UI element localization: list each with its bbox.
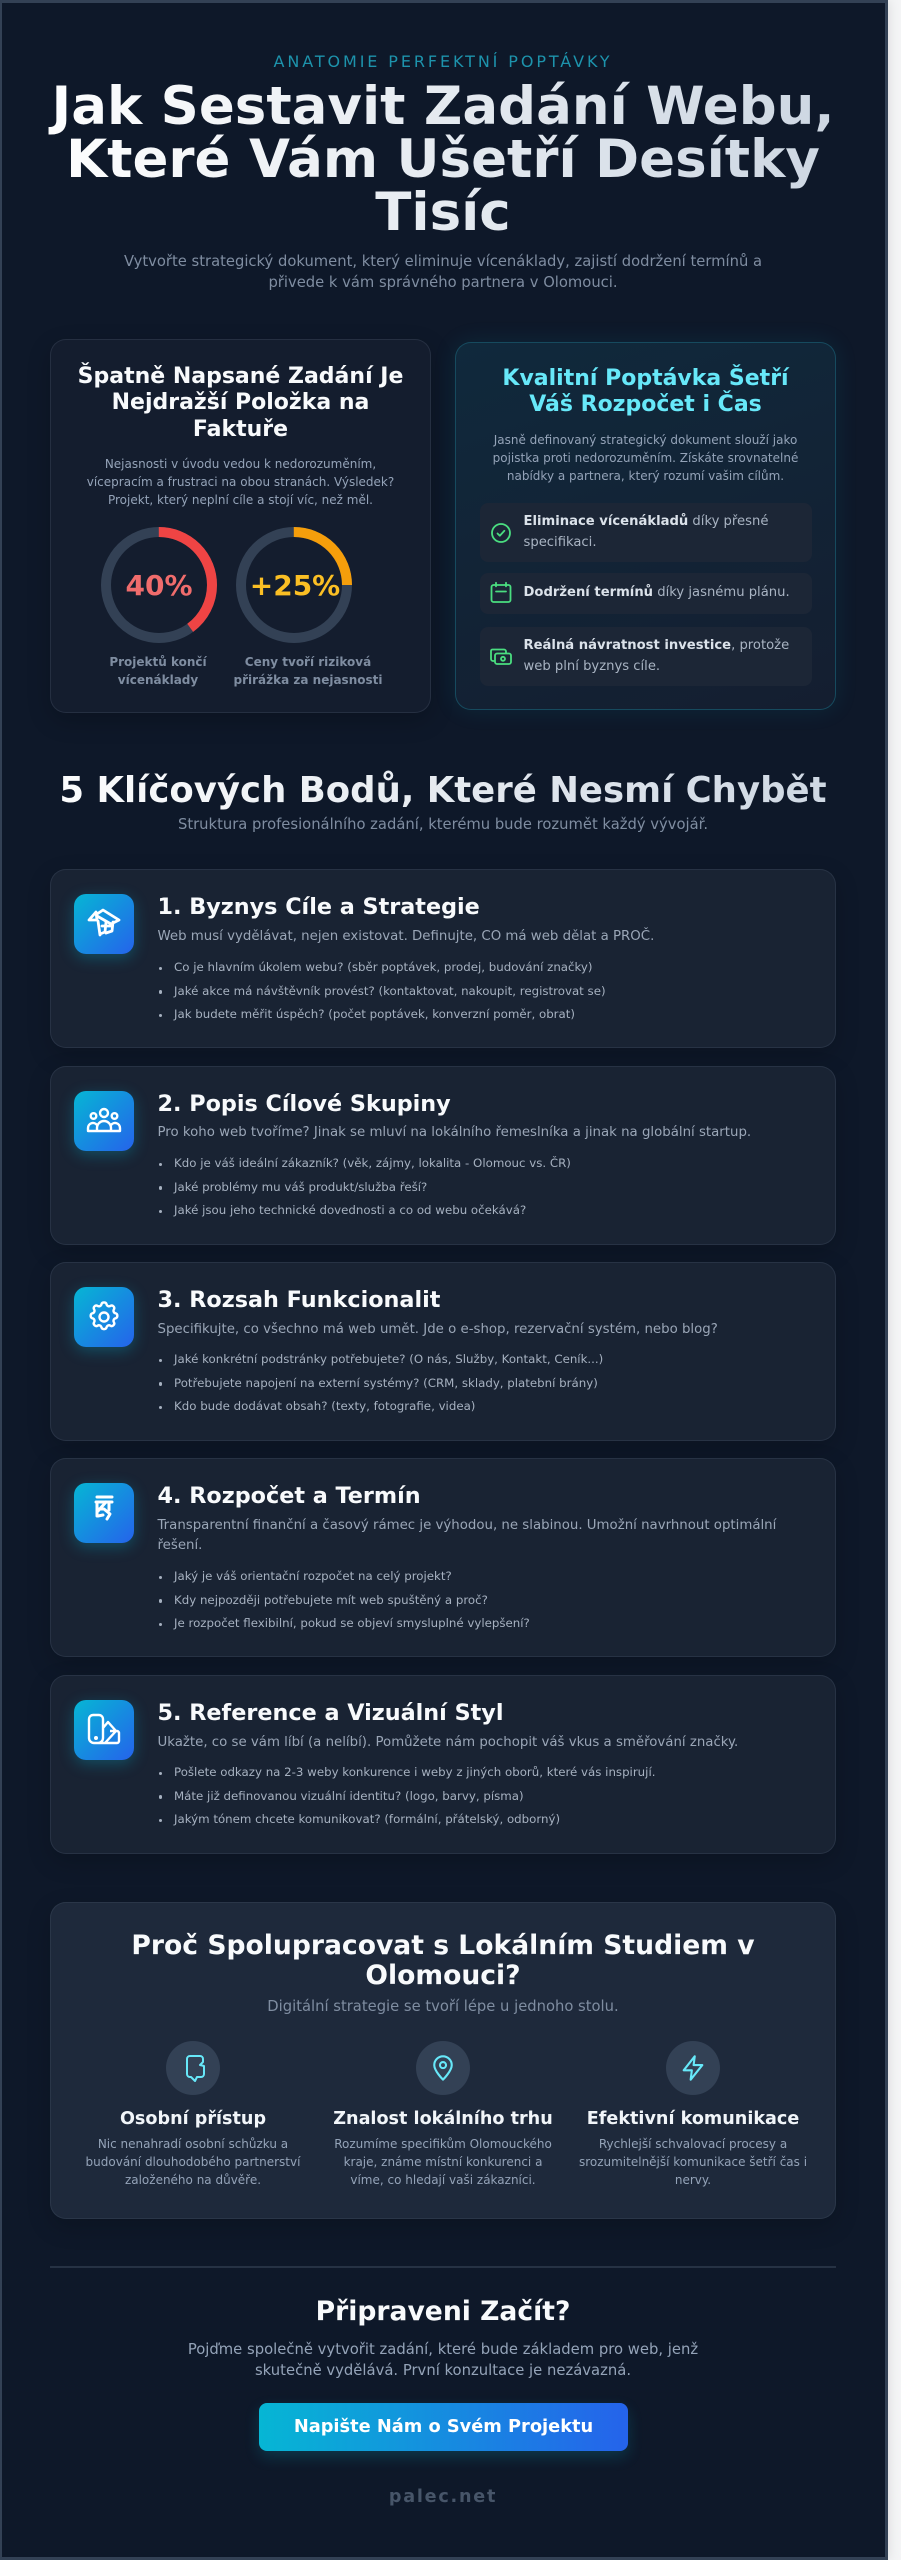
step description: Specifikujte, co všechno má web umět. Jde o e-shop, rezervační systém, nebo blog?	[158, 1322, 718, 1337]
why heading: Olomouci?	[365, 1960, 521, 1991]
icon: swatches	[74, 1700, 134, 1760]
column: personal	[86, 2041, 301, 2187]
checklist: Potřebujete napojení na externí systémy? (CRM, sklady, platební brány)	[174, 1376, 598, 1390]
checklist: Jaký je váš orientační rozpočet na celý projekt?	[174, 1569, 452, 1583]
step heading: 3. Rozsah Funkcionalit	[158, 1287, 440, 1313]
subtitle: Vytvořte strategický dokument, který eliminuje vícenáklady, zajistí dodržení termínů a	[124, 253, 762, 270]
section subtitle: Struktura profesionálního zadání, kterému bude rozumět každý vývojář.	[178, 816, 708, 833]
why heading: Proč Spolupracovat s Lokálním Studiem v	[131, 1930, 755, 1961]
benefit text: Reálná návratnost investice, protože	[524, 638, 789, 653]
checklist: Jaké konkrétní podstránky potřebujete? (O nás, Služby, Kontakt, Ceník...)	[174, 1352, 603, 1366]
panel: solution	[455, 342, 836, 710]
CTA heading: Připraveni Začít?	[316, 2296, 570, 2327]
step heading: 2. Popis Cílové Skupiny	[158, 1091, 451, 1117]
donut label 2: Ceny tvoří riziková	[245, 655, 371, 669]
benefit text: Dodržení termínů díky jasnému plánu.	[524, 585, 790, 600]
donut label 2: přirážka za nejasnosti	[234, 673, 382, 687]
solution text: nabídky a partnera, který rozumí vašim cílům.	[507, 469, 784, 483]
checklist: Pošlete odkazy na 2-3 weby konkurence i weby z jiných oborů, které vás inspirují.	[174, 1765, 655, 1779]
CTA text: Pojďme společně vytvořit zadání, které bude základem pro web, jenž	[188, 2341, 698, 2358]
step description: Ukažte, co se vám líbí (a nelíbí). Pomůžete nám pochopit váš vkus a směřování značky.	[158, 1735, 738, 1750]
donut label 1	[109, 655, 207, 687]
checklist: Kdo je váš ideální zákazník? (věk, zájmy, lokalita - Olomouc vs. ČR)	[174, 1156, 571, 1170]
column text: nervy.	[675, 2173, 711, 2187]
title: Jak Sestavit Zadání Webu,	[51, 76, 835, 137]
column heading: Znalost lokálního trhu	[333, 2109, 553, 2129]
checklist: Jak budete měřit úspěch? (počet poptávek, konverzní poměr, obrat)	[174, 1007, 575, 1021]
CTA text	[188, 2341, 698, 2379]
solution text	[493, 433, 798, 483]
why subtitle: Digitální strategie se tvoří lépe u jednoho stolu.	[267, 1998, 619, 2015]
column text: Nic nenahradí osobní schůzku a	[98, 2137, 288, 2151]
benefit: terminy	[480, 573, 812, 614]
step heading: 1. Byznys Cíle a Strategie	[158, 894, 480, 920]
title: Které Vám Ušetří Desítky	[66, 129, 820, 190]
benefit text: Eliminace vícenákladů díky přesné	[524, 514, 768, 529]
column text	[86, 2137, 301, 2187]
column text	[334, 2137, 552, 2187]
step description	[157, 1518, 777, 1553]
problem heading: Nejdražší Položka na	[112, 390, 369, 415]
checklist: Máte již definovanou vizuální identitu? (logo, barvy, písma)	[174, 1789, 524, 1803]
donut chart: 40%	[101, 527, 217, 643]
panel: step 2	[50, 1066, 836, 1245]
subtitle	[124, 253, 762, 291]
column: market	[333, 2041, 553, 2187]
eyebrow: ANATOMIE PERFEKTNÍ POPTÁVKY	[274, 52, 612, 71]
checklist	[159, 960, 606, 1021]
panel: step 5	[50, 1675, 836, 1854]
solution heading	[502, 364, 790, 417]
column text: srozumitelnější komunikace šetří čas i	[579, 2155, 807, 2169]
problem heading	[78, 362, 403, 442]
CTA button	[259, 2403, 628, 2451]
why heading	[131, 1930, 755, 1991]
problem text: vícepracím a frustraci na obou stranách. Výsledek?	[87, 475, 394, 489]
icon: budget	[74, 1483, 134, 1543]
checklist: Jaké akce má návštěvník provést? (kontaktovat, nakoupit, registrovat se)	[174, 984, 606, 998]
panel: step 3	[50, 1262, 836, 1441]
benefit: eliminace	[480, 503, 812, 562]
donut label 2	[234, 655, 382, 687]
donut chart: +25%: +25%	[250, 569, 340, 602]
CTA text: skutečně vydělává. První konzultace je nezávazná.	[255, 2362, 631, 2379]
benefit text: web plní byznys cíle.	[524, 658, 660, 674]
solution heading: Váš Rozpočet i Čas	[529, 392, 762, 417]
problem text: Nejasnosti v úvodu vedou k nedorozuměním,	[105, 457, 376, 471]
benefit text: specifikaci.	[524, 534, 596, 550]
title: Tisíc	[375, 182, 511, 243]
column text: víme, co hledají vaši zákazníci.	[350, 2173, 536, 2187]
section heading: 5 Klíčových Bodů, Které Nesmí Chybět	[59, 770, 827, 811]
panel: why local	[50, 1902, 836, 2219]
icon: users	[74, 1091, 134, 1151]
problem heading: Špatně Napsané Zadání Je	[78, 364, 403, 389]
column heading: Efektivní komunikace	[587, 2109, 799, 2129]
problem text	[87, 457, 394, 507]
checklist: Co je hlavním úkolem webu? (sběr poptávek, prodej, budování značky)	[174, 960, 593, 974]
icon: goal	[74, 894, 134, 954]
solution heading: Kvalitní Poptávka Šetří	[502, 366, 789, 391]
step description: Transparentní finanční a časový rámec je výhodou, ne slabinou. Umožní navrhnout optimální	[158, 1518, 776, 1533]
title	[20, 80, 866, 239]
donut label 1: vícenáklady	[118, 673, 198, 687]
footer brand: palec.net	[389, 2487, 497, 2507]
icon: check	[491, 523, 511, 543]
subtitle: přivede k vám správného partnera v Olomouci.	[268, 274, 618, 291]
checklist	[159, 1765, 655, 1826]
column: communication	[579, 2041, 807, 2187]
checklist: Je rozpočet flexibilní, pokud se objeví smysluplné vylepšení?	[174, 1616, 530, 1630]
problem heading: Faktuře	[193, 417, 288, 442]
step heading: 4. Rozpočet a Termín	[158, 1483, 421, 1509]
checklist: Kdo bude dodávat obsah? (texty, fotografie, videa)	[174, 1399, 475, 1413]
checklist: Kdy nejpozději potřebujete mít web spuštěný a proč?	[174, 1593, 488, 1607]
checklist	[159, 1156, 571, 1217]
column text: Rozumíme specifikům Olomouckého	[334, 2137, 552, 2151]
donut chart: 40%: 40%	[125, 569, 193, 602]
icon: pin	[416, 2041, 470, 2095]
solution text: pojistka proti nedorozuměním. Získáte srovnatelné	[493, 451, 798, 465]
problem text: Projekt, který neplní cíle a stojí víc, než měl.	[108, 493, 373, 507]
column heading: Osobní přístup	[120, 2109, 266, 2129]
panel: step 4	[50, 1458, 836, 1657]
donut label 1: Projektů končí	[109, 655, 207, 669]
icon: lightning	[666, 2041, 720, 2095]
checklist: Jakým tónem chcete komunikovat? (formální, přátelský, odborný)	[174, 1812, 560, 1826]
CTA button: Napište Nám o Svém Projektu	[294, 2416, 593, 2437]
step description: Web musí vydělávat, nejen existovat. Definujte, CO má web dělat a PROČ.	[158, 929, 654, 944]
checklist: Jaké jsou jeho technické dovednosti a co od webu očekává?	[174, 1203, 526, 1217]
column text: Rychlejší schvalovací procesy a	[599, 2137, 787, 2151]
panel: problem	[50, 339, 431, 713]
benefit: navratnost	[480, 627, 812, 686]
donut chart: +25%	[236, 527, 352, 643]
icon: money	[490, 648, 512, 665]
column text: kraje, známe místní konkurenci a	[344, 2155, 542, 2169]
benefit text	[524, 638, 789, 674]
checklist: Jaké problémy mu váš produkt/služba řeší?	[174, 1180, 427, 1194]
icon: calendar	[490, 582, 512, 603]
column text: založeného na důvěře.	[125, 2173, 261, 2187]
icon: chat	[166, 2041, 220, 2095]
solution text: Jasně definovaný strategický dokument slouží jako	[494, 433, 797, 447]
checklist	[159, 1569, 530, 1630]
column text: budování dlouhodobého partnerství	[86, 2155, 300, 2169]
benefit text	[524, 513, 768, 550]
step description: řešení.	[158, 1538, 202, 1553]
panel: step 1	[50, 869, 836, 1048]
checklist	[159, 1352, 603, 1413]
step heading: 5. Reference a Vizuální Styl	[158, 1700, 503, 1726]
column text	[579, 2137, 807, 2187]
icon: gear	[74, 1287, 134, 1347]
step description: Pro koho web tvoříme? Jinak se mluví na lokálního řemeslníka a jinak na globální startup.	[158, 1125, 751, 1140]
